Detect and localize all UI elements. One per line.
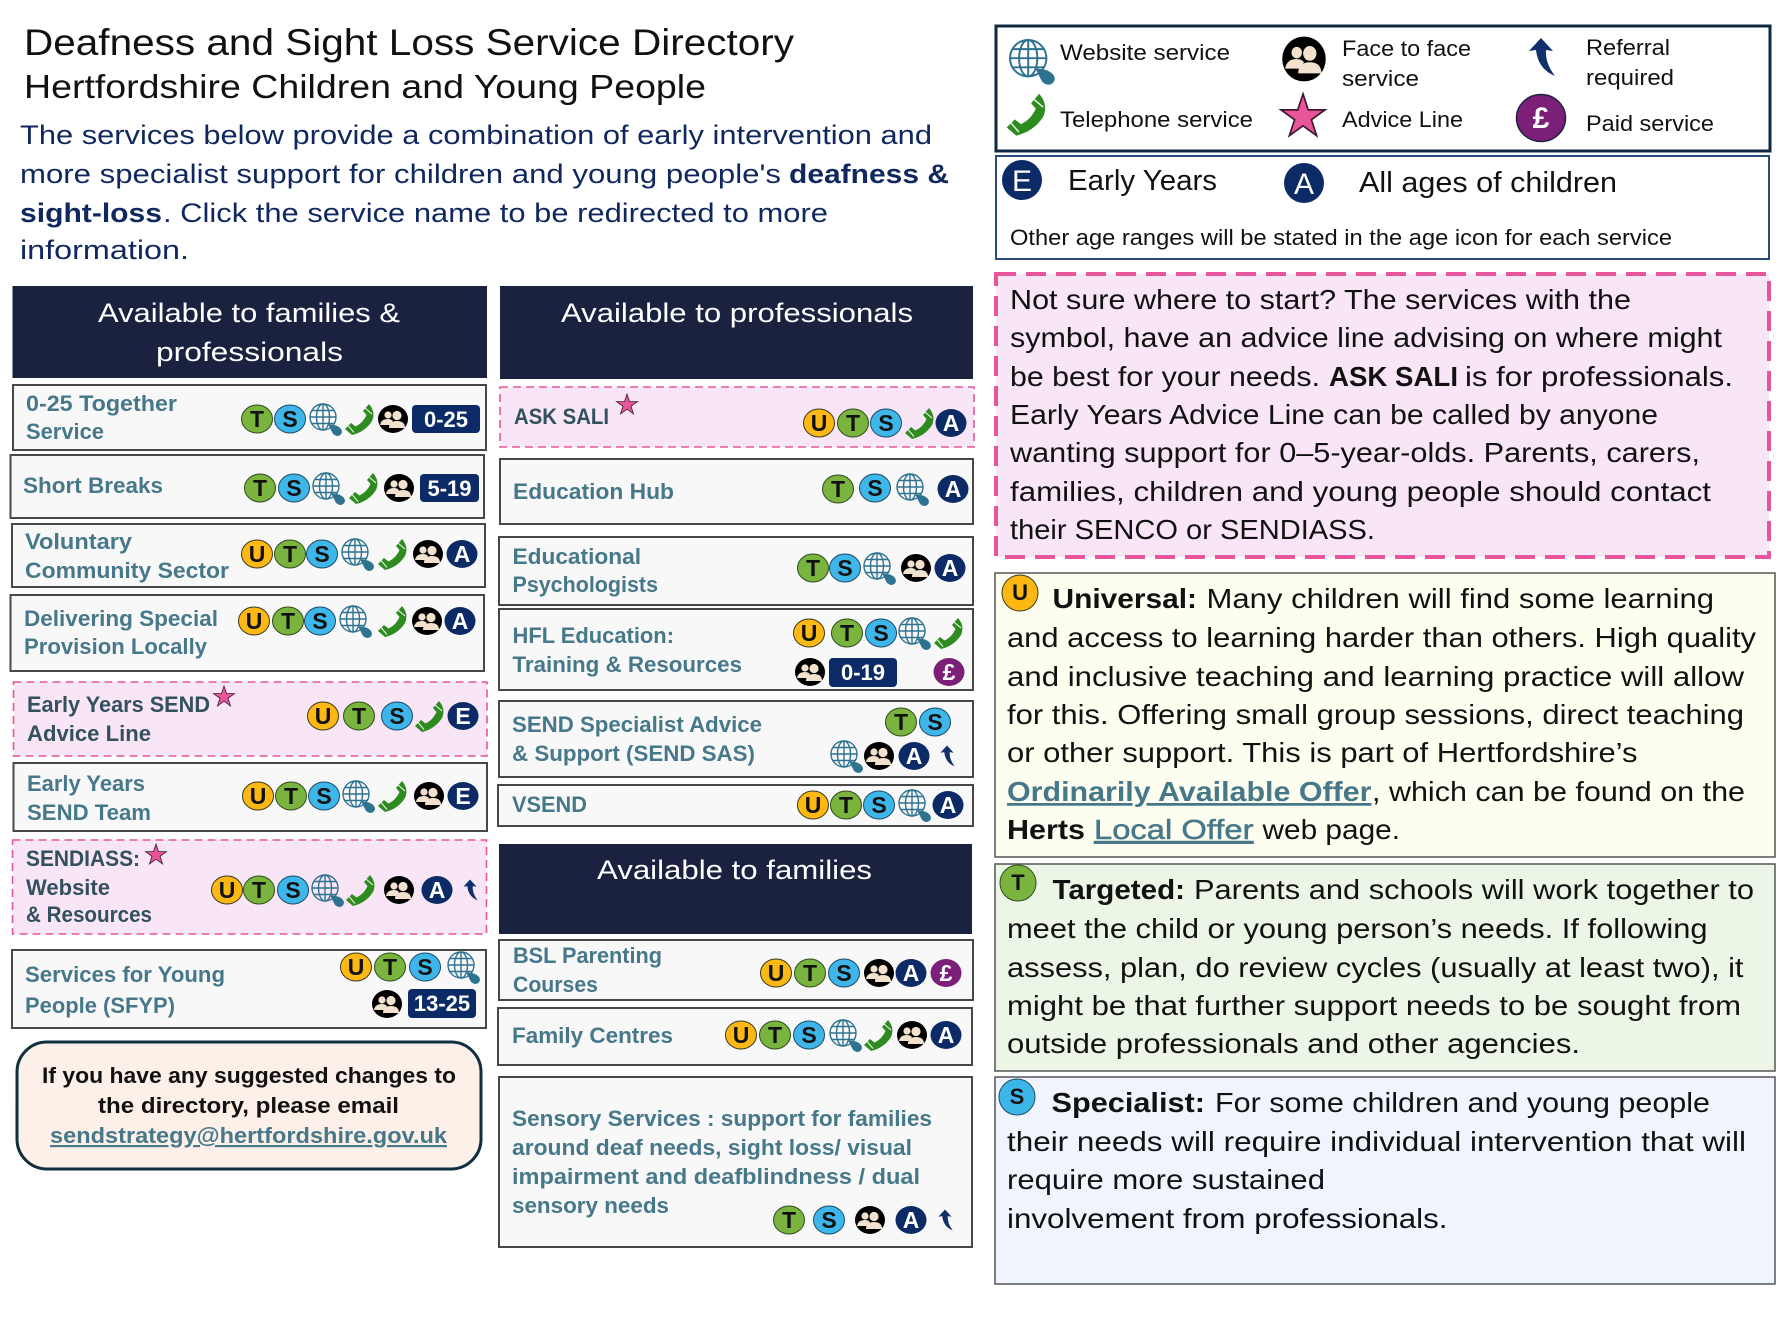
service: BSL Parenting Courses: T — [803, 960, 817, 986]
panel: specialist: their needs will require individual intervention that will — [1007, 1126, 1746, 1157]
service: VSEND: VSEND — [512, 792, 587, 817]
panel: universal: and access to learning harder than others. High quality — [1007, 622, 1756, 653]
intro text: more specialist support for children and young people's — [20, 159, 781, 189]
service: Educational Psychologists: A — [942, 555, 958, 581]
panel: specialist: S — [1010, 1084, 1024, 1109]
service: SENDIASS: S — [285, 877, 301, 903]
panel: icon legend — [996, 26, 1770, 151]
service: SEND Specialist Advice and Support: A — [906, 743, 922, 769]
service: VSEND: A — [940, 792, 956, 818]
intro text: . Click the service name to be redirected to more — [163, 198, 828, 228]
service: Family Centres: Family Centres — [512, 1023, 673, 1048]
service: Delivering Special Provision Locally: A — [452, 608, 468, 634]
service: Educational Psychologists: Psychologists — [512, 572, 658, 597]
panel: icon legend: Website service — [1060, 40, 1230, 65]
service: SEND Specialist Advice and Support: SEND Specialist Advice — [512, 712, 762, 737]
service: Sensory Services: A — [903, 1207, 919, 1233]
service: VSEND: S — [871, 792, 887, 818]
service: 0-25 Together Service: 0-25 — [424, 407, 468, 432]
panel: universal: for this. Offering small group sessions, direct teaching — [1007, 699, 1744, 730]
panel: universal: or other support. This is part of Hertfordshire’s — [1007, 737, 1638, 768]
service: Sensory Services: Sensory Services : support for families — [512, 1106, 932, 1131]
panel: not sure where to start — [996, 274, 1769, 557]
callout: suggested changes: If you have any suggested changes to — [42, 1063, 456, 1088]
panel: icon legend: £ — [1533, 102, 1550, 135]
panel: not sure where to start: is for professionals. — [1465, 361, 1733, 392]
service: 0-25 Together Service: Service — [26, 419, 104, 444]
service: SENDIASS: & Resources — [26, 902, 152, 927]
service: Services for Young People: U — [348, 954, 364, 980]
service: Early Years SEND Team: Early Years — [27, 771, 145, 796]
title — [24, 22, 795, 105]
service: Sensory Services — [499, 1077, 972, 1247]
service: HFL Education: T — [840, 620, 854, 646]
panel: universal: Universal: — [1052, 583, 1197, 614]
panel: universal: Herts — [1007, 814, 1085, 845]
callout: suggested changes: the directory, please email — [98, 1093, 399, 1118]
title: Deafness and Sight Loss Service Directory — [24, 22, 795, 63]
service: Voluntary Community Sector: Community Sector — [25, 558, 229, 583]
panel: not sure where to start: Early Years Advice Line can be called by anyone — [1010, 399, 1658, 430]
service: Education Hub: Education Hub — [513, 479, 674, 504]
service: SEND Specialist Advice and Support — [499, 701, 973, 777]
service: Delivering Special Provision Locally: S — [312, 608, 328, 634]
service: Sensory Services: around deaf needs, sight loss/ visual — [512, 1135, 912, 1160]
service: Family Centres — [498, 1008, 972, 1065]
service: Educational Psychologists: S — [837, 555, 853, 581]
service: Services for Young People: People (SFYP) — [25, 993, 175, 1018]
service: SENDIASS — [12, 840, 486, 934]
service: BSL Parenting Courses: Courses — [513, 972, 598, 997]
service: Educational Psychologists — [499, 537, 973, 605]
panel: age key: Other age ranges will be stated in the age icon for each service — [1010, 225, 1672, 250]
panel: icon legend: Referral — [1586, 35, 1670, 60]
service: 0-25 Together Service: S — [282, 406, 298, 432]
service: SENDIASS: U — [219, 877, 235, 903]
service: SENDIASS: SENDIASS: — [26, 846, 140, 871]
service: Sensory Services: S — [821, 1207, 837, 1233]
panel: targeted: Parents and schools will work together to — [1194, 874, 1754, 905]
service: Delivering Special Provision Locally: U — [246, 608, 262, 634]
heading: available to families: Available to families — [597, 855, 872, 885]
service: VSEND: U — [805, 792, 821, 818]
panel: age key — [996, 156, 1769, 259]
service: Early Years SEND Team: SEND Team — [27, 800, 151, 825]
panel: targeted: might be that further support needs to be sought from — [1007, 990, 1741, 1021]
service: Early Years SEND Advice Line: Advice Line — [27, 721, 151, 746]
service: VSEND — [498, 785, 973, 826]
service: ASK SALI: S — [878, 410, 894, 436]
panel: specialist: require more sustained — [1007, 1164, 1325, 1195]
service: SEND Specialist Advice and Support: & Support (SEND SAS) — [512, 741, 755, 766]
service: Educational Psychologists: Educational — [512, 544, 641, 569]
panel: age key: All ages of children — [1359, 167, 1617, 199]
service: Family Centres: U — [733, 1022, 749, 1048]
panel: universal — [995, 573, 1775, 857]
service: ASK SALI: T — [846, 410, 860, 436]
service: HFL Education: S — [873, 620, 889, 646]
panel: age key: A — [1294, 168, 1314, 201]
panel: targeted — [995, 864, 1775, 1071]
panel: not sure where to start: ASK SALI — [1329, 361, 1458, 392]
service: HFL Education — [499, 609, 973, 690]
panel: icon legend: Face to face — [1342, 36, 1471, 61]
service: HFL Education: HFL Education: — [512, 623, 674, 648]
service: ASK SALI: ASK SALI — [514, 404, 609, 429]
panel: icon legend: Advice Line — [1342, 107, 1463, 132]
service: BSL Parenting Courses: A — [903, 960, 919, 986]
service: Early Years SEND Team — [14, 763, 487, 831]
service: SEND Specialist Advice and Support: S — [927, 709, 943, 735]
service: Delivering Special Provision Locally: T — [281, 608, 295, 634]
intro text: sight-loss — [20, 198, 162, 228]
service: Short Breaks — [10, 455, 484, 518]
service: Education Hub: T — [831, 476, 845, 502]
heading: available to professionals: Available to professionals — [561, 298, 913, 328]
service: Education Hub — [500, 459, 973, 524]
service: Early Years SEND Advice Line: T — [352, 703, 366, 729]
service: Voluntary Community Sector: U — [249, 541, 265, 567]
intro text: deafness & — [789, 159, 949, 189]
service: SEND Specialist Advice and Support: T — [894, 709, 908, 735]
panel: targeted: outside professionals and other agencies. — [1007, 1028, 1580, 1059]
service: Voluntary Community Sector — [12, 524, 485, 587]
service: HFL Education: U — [801, 620, 817, 646]
heading: available to families and professionals — [12, 286, 487, 378]
service: Short Breaks: Short Breaks — [23, 473, 163, 498]
service: Early Years SEND Team: E — [455, 783, 471, 809]
title: Hertfordshire Children and Young People — [24, 68, 706, 105]
service: Education Hub: A — [945, 476, 961, 502]
service: ASK SALI — [500, 387, 974, 447]
panel: specialist: Specialist: — [1052, 1087, 1205, 1118]
service: Voluntary Community Sector: Voluntary — [25, 529, 133, 554]
service: Short Breaks: T — [253, 475, 267, 501]
service: Services for Young People: Services for Young — [25, 962, 225, 987]
panel: not sure where to start: wanting support for 0–5-year-olds. Parents, carers, — [1009, 437, 1700, 468]
panel: icon legend: required — [1586, 65, 1674, 90]
service: Short Breaks: 5-19 — [427, 476, 472, 501]
panel: not sure where to start: be best for your needs. — [1010, 361, 1320, 392]
service: ASK SALI: A — [943, 410, 959, 436]
panel: targeted: assess, plan, do review cycles (usually at least two), it — [1007, 952, 1744, 983]
service: Early Years SEND Advice Line: Early Years SEND — [27, 692, 210, 717]
service: Early Years SEND Team: T — [284, 783, 298, 809]
panel: specialist — [995, 1077, 1775, 1284]
service: HFL Education: £ — [943, 659, 956, 685]
callout: suggested changes — [17, 1042, 481, 1169]
service: Sensory Services: impairment and deafblindness / dual — [512, 1164, 920, 1189]
service: BSL Parenting Courses: £ — [940, 960, 953, 986]
service: BSL Parenting Courses — [499, 940, 973, 1000]
service: 0-25 Together Service: 0-25 Together — [26, 391, 177, 416]
service: Early Years SEND Advice Line — [14, 682, 487, 756]
panel: specialist: involvement from professionals. — [1007, 1203, 1448, 1234]
service: Services for Young People: T — [383, 954, 397, 980]
service: Voluntary Community Sector: S — [314, 541, 330, 567]
service: Family Centres: A — [938, 1022, 954, 1048]
panel: not sure where to start: symbol, have an advice line advising on where might — [1010, 322, 1722, 353]
service: Delivering Special Provision Locally — [10, 595, 484, 671]
service: Sensory Services: sensory needs — [512, 1193, 669, 1218]
service: VSEND: T — [839, 792, 853, 818]
service: Family Centres: S — [801, 1022, 817, 1048]
service: Delivering Special Provision Locally: Provision Locally — [24, 634, 208, 659]
panel: universal: web page. — [1261, 814, 1400, 845]
service: HFL Education: Training & Resources — [512, 652, 742, 677]
panel: universal: Many children will find some learning — [1206, 583, 1714, 614]
service: Voluntary Community Sector: A — [454, 541, 470, 567]
service: SENDIASS: A — [429, 877, 445, 903]
panel: universal: Ordinarily Available Offer — [1007, 776, 1372, 807]
service: Short Breaks: S — [286, 475, 302, 501]
panel: specialist: For some children and young people — [1215, 1087, 1710, 1118]
service: BSL Parenting Courses: BSL Parenting — [513, 943, 662, 968]
service: Services for Young People — [12, 950, 486, 1028]
service: Services for Young People: 13-25 — [414, 991, 470, 1016]
panel: universal: , which can be found on the — [1372, 776, 1745, 807]
service: Voluntary Community Sector: T — [283, 541, 297, 567]
service: Education Hub: S — [867, 475, 883, 501]
service: BSL Parenting Courses: U — [768, 960, 784, 986]
service: Early Years SEND Advice Line: E — [455, 703, 471, 729]
intro text: The services below provide a combination of early intervention and — [20, 120, 932, 150]
service: HFL Education: 0-19 — [841, 660, 885, 685]
intro text: information. — [20, 235, 189, 265]
service: Services for Young People: S — [417, 954, 433, 980]
intro text — [20, 120, 949, 265]
service: BSL Parenting Courses: S — [836, 960, 852, 986]
panel: icon legend: Telephone service — [1060, 107, 1253, 132]
service: SENDIASS: Website — [26, 875, 110, 900]
panel: age key: Early Years — [1068, 165, 1217, 197]
panel: not sure where to start: their SENCO or SENDIASS. — [1010, 514, 1375, 545]
service: Educational Psychologists: T — [806, 555, 820, 581]
heading: available to families — [499, 844, 972, 934]
panel: not sure where to start: families, children and young people should contact — [1010, 476, 1711, 507]
callout: suggested changes: sendstrategy@hertfordshire.gov.uk — [50, 1123, 448, 1148]
service: Delivering Special Provision Locally: Delivering Special — [24, 606, 218, 631]
heading: available to families and professionals: Available to families & — [98, 298, 400, 328]
panel: universal: and inclusive teaching and learning practice will allow — [1007, 661, 1744, 692]
panel: icon legend: service — [1342, 66, 1419, 91]
service: Family Centres: T — [768, 1022, 782, 1048]
service: Sensory Services: T — [782, 1207, 796, 1233]
panel: targeted: Targeted: — [1052, 874, 1185, 905]
panel: targeted: T — [1011, 870, 1025, 895]
service: Early Years SEND Advice Line: U — [315, 703, 331, 729]
heading: available to families and professionals: professionals — [156, 337, 343, 367]
panel: age key: E — [1012, 165, 1032, 198]
service: 0-25 Together Service — [13, 385, 486, 450]
panel: targeted: meet the child or young person’s needs. If following — [1007, 913, 1708, 944]
service: 0-25 Together Service: T — [250, 406, 264, 432]
service: SENDIASS: T — [252, 877, 266, 903]
panel: universal: U — [1012, 580, 1028, 605]
panel: universal: Local Offer — [1094, 814, 1254, 845]
heading: available to professionals — [500, 286, 973, 379]
panel: icon legend: Paid service — [1586, 111, 1714, 136]
panel: not sure where to start: Not sure where to start? The services with the — [1010, 284, 1631, 315]
service: ASK SALI: U — [811, 410, 827, 436]
service: Early Years SEND Advice Line: S — [389, 703, 405, 729]
service: Early Years SEND Team: S — [316, 783, 332, 809]
service: Early Years SEND Team: U — [250, 783, 266, 809]
